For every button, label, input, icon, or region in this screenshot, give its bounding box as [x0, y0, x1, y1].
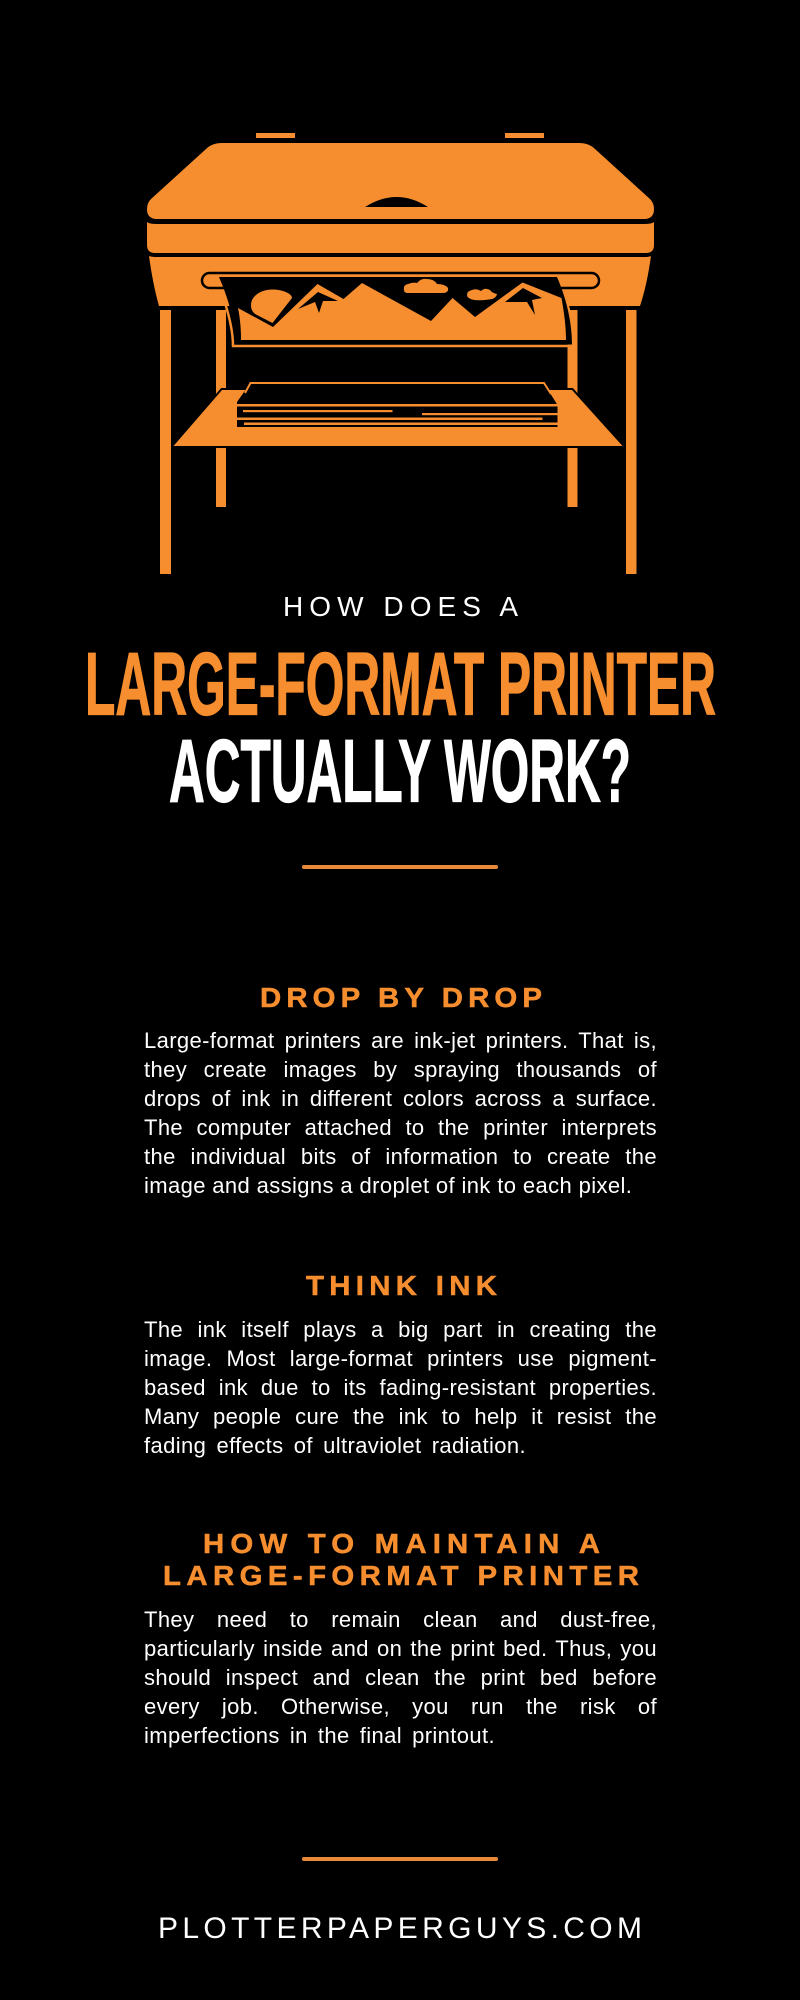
- illustration: large-format printer: [147, 133, 654, 574]
- paper sheet outline: [224, 300, 574, 346]
- inner legs lower: [216, 448, 578, 507]
- left paper guide tab: [256, 133, 295, 138]
- panel: drop by drop: [144, 983, 657, 1198]
- heading: how to maintain a large-format printer: HOW TO MAINTAIN A: [203, 1529, 600, 1560]
- printer lid: [147, 143, 654, 219]
- body text: drops of ink in different colors across a surface.: [144, 1086, 657, 1111]
- heading: how to maintain a large-format printer: LARGE-FORMAT PRINTER: [163, 1561, 639, 1592]
- heading: drop by drop: DROP BY DROP: [260, 983, 542, 1014]
- top divider: [302, 865, 498, 869]
- bottom divider: [302, 1857, 498, 1861]
- body text: Many people cure the ink to help it resist the: [144, 1404, 657, 1429]
- inner legs upper: [216, 310, 578, 395]
- output shelf: [174, 390, 622, 446]
- body text: image. Most large-format printers use pigment-: [144, 1346, 657, 1371]
- body text: image and assigns a droplet of ink to each pixel.: [144, 1173, 632, 1198]
- body text: based ink due to its fading-resistant properties.: [144, 1375, 657, 1400]
- paper stack on shelf: [237, 383, 558, 427]
- body text: [144, 1317, 657, 1458]
- body text: fading effects of ultraviolet radiation.: [144, 1433, 526, 1458]
- panel: think ink: [144, 1271, 657, 1458]
- body text: should inspect and clean the print bed before: [144, 1665, 657, 1690]
- heading: think ink: THINK INK: [306, 1271, 497, 1302]
- body text: They need to remain clean and dust-free,: [144, 1607, 657, 1632]
- heading: how to maintain a large-format printer: [163, 1529, 639, 1592]
- left snow cap: [298, 292, 338, 313]
- sun: [251, 289, 292, 323]
- body text: Large-format printers are ink-jet printers. That is,: [144, 1028, 657, 1053]
- lid handle: [365, 197, 428, 207]
- body text: every job. Otherwise, you run the risk of: [144, 1694, 657, 1719]
- eyebrow: how does a: HOW DOES A: [283, 591, 518, 622]
- small cloud: [467, 289, 497, 300]
- body text: they create images by spraying thousands of: [144, 1057, 657, 1082]
- body text: [144, 1028, 657, 1198]
- printer body: [149, 256, 651, 306]
- panel: how to maintain a large-format printer: [144, 1529, 657, 1748]
- body text: The ink itself plays a big part in creating the: [144, 1317, 657, 1342]
- body text: the individual bits of information to create the: [144, 1144, 657, 1169]
- body text: The computer attached to the printer interprets: [144, 1115, 657, 1140]
- printed mountains image: [238, 282, 566, 340]
- lid band: [147, 222, 654, 253]
- paper slot: [202, 273, 599, 288]
- printed paper sheet: [219, 277, 572, 344]
- right paper guide tab: [505, 133, 544, 138]
- title block: [85, 591, 716, 820]
- body text: imperfections in the final printout.: [144, 1723, 495, 1748]
- body text: particularly inside and on the print bed. Thus, you: [144, 1636, 657, 1661]
- right snow cap: [505, 288, 542, 315]
- body text: [144, 1607, 657, 1748]
- outer legs: [160, 310, 636, 574]
- large cloud: [404, 279, 448, 293]
- footer website: PLOTTERPAPERGUYS.COM: [158, 1912, 642, 1945]
